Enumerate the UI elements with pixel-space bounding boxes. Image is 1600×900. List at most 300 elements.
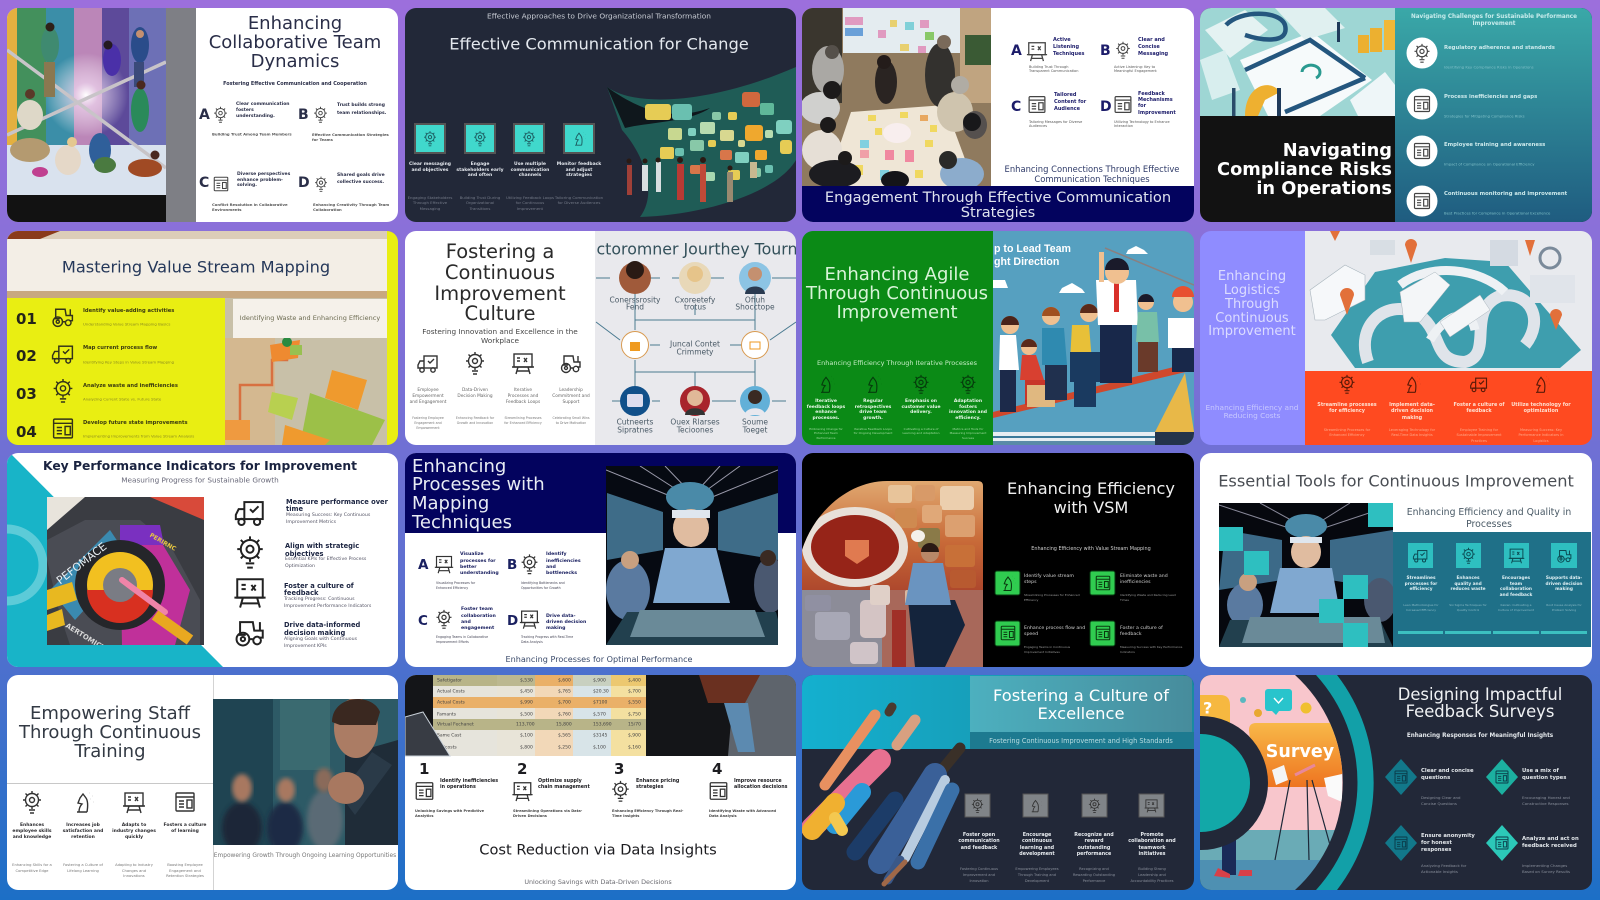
- step 1: Engaging Stakeholders: [408, 194, 452, 200]
- column 3: Sustainable Improvement: [1456, 433, 1502, 437]
- item 1: Measuring Success: Key Continuous: [286, 512, 371, 518]
- top photo strip: [7, 231, 387, 298]
- item D: Shared goals drive: [337, 172, 385, 178]
- footer caption: Enhancing Processes for Optimal Performance: [505, 654, 693, 664]
- item C: Conflict Resolution in Collaborative: [212, 202, 288, 206]
- column 3: [1073, 794, 1115, 883]
- column 3: Processes and: [508, 392, 539, 398]
- item B: Active Listening: Key to: [1114, 65, 1155, 69]
- panel: Key Performance Indicators for Improvement: [0, 453, 398, 667]
- step 2: and often: [468, 172, 492, 178]
- item 2: [1090, 571, 1176, 602]
- item D: [507, 611, 586, 644]
- item 1: Designing Clear and: [1421, 794, 1461, 800]
- item 3: speed: [1024, 630, 1038, 636]
- title: Training: [73, 740, 146, 762]
- column 1: Employee: [417, 386, 439, 392]
- photo: spreadsheet and analyst: $,570: [593, 712, 606, 718]
- item 3: [995, 621, 1085, 654]
- image with teal squares: [1219, 503, 1396, 647]
- item 4: feedback: [1120, 630, 1142, 636]
- item 2: Streamlining Operations via Data-: [513, 809, 583, 813]
- column 3: Kaizen: Cultivating a: [1501, 603, 1532, 607]
- item 1: Efficiency: [1024, 598, 1039, 602]
- item B: Identify: [546, 550, 567, 556]
- item D: Collaboration: [313, 206, 342, 212]
- column 4: Support: [562, 398, 580, 404]
- customer journey diagram: Tecioones: [676, 426, 713, 434]
- panel: Empowering Staff Through Continuous Training: [7, 675, 398, 890]
- photo: spreadsheet and analyst: Actual Costs: [437, 700, 466, 706]
- step 3: Use multiple: [514, 160, 546, 166]
- title: Improvement: [1208, 324, 1296, 338]
- item C: C: [199, 175, 209, 191]
- title: Effective Communication for Change: [449, 34, 749, 54]
- item D: D: [1100, 99, 1112, 115]
- column 1: Enhanced Efficiency: [1329, 433, 1365, 437]
- item 2: inefficiencies: [1120, 578, 1151, 584]
- item 1: [1385, 759, 1474, 806]
- title: Fostering a: [446, 240, 554, 262]
- item A: Building Trust Among Team Members: [212, 132, 292, 136]
- item 3: Ensure anonymity: [1421, 833, 1475, 839]
- column 2: Regular: [863, 398, 884, 404]
- customer journey diagram: trotus: [684, 302, 706, 312]
- photo: spreadsheet and analyst: [405, 675, 796, 756]
- step 03: Analyze waste and inefficiencies: [83, 383, 178, 389]
- item 4: feedback received: [1522, 843, 1577, 849]
- photo: spreadsheet and analyst: $,700: [628, 688, 641, 694]
- column 3: customer value: [901, 404, 941, 410]
- column 4: fosters: [959, 404, 977, 410]
- teal panel: [1393, 532, 1591, 647]
- column 3: feedback: [1466, 408, 1492, 414]
- step 4: Monitor feedback: [557, 160, 602, 166]
- title: Feedback Surveys: [1406, 702, 1554, 720]
- item 3: Improvement Performance Indicators: [284, 602, 372, 608]
- panel: Fostering a Continuous Improvement Culture: [405, 231, 798, 445]
- step 2: [456, 124, 504, 210]
- photo: spreadsheet and analyst: $,100: [593, 744, 606, 750]
- item B: inefficiencies: [546, 558, 581, 564]
- item 2: Encouraging Honest and: [1522, 794, 1570, 800]
- photo: spreadsheet and analyst: $,990: [520, 700, 533, 706]
- customer journey diagram: Sipratnes: [617, 426, 653, 434]
- item C: engagement: [461, 624, 495, 630]
- column 4: [1511, 376, 1571, 443]
- column 2: Leveraging Technology for: [1389, 428, 1436, 432]
- column 3: Rewarding Outstanding: [1073, 873, 1115, 877]
- subtitle: Enhancing Responses for Meaningful Insights: [1407, 733, 1554, 739]
- navy title band: Techniques: [411, 512, 512, 532]
- column 3: reward: [1084, 838, 1104, 844]
- subtitle: Measuring Progress for Sustainable Growth: [121, 476, 279, 484]
- step 2: Organizational: [466, 200, 494, 204]
- item C: enhance problem-: [237, 176, 283, 182]
- item A: A: [199, 107, 210, 123]
- column 4: Metrics and Tools for: [953, 427, 984, 431]
- photo: spreadsheet and analyst: Safetigator: [437, 678, 462, 684]
- title: Collaborative Team: [209, 32, 381, 52]
- photo: spreadsheet and analyst: $,450: [520, 688, 533, 694]
- item 2: [237, 536, 367, 568]
- item 3: Foster a culture of: [284, 582, 354, 590]
- photo: sticky note map: [225, 298, 387, 445]
- column 2: Encourage: [1023, 832, 1052, 838]
- column 4: Building Strong: [1138, 867, 1166, 871]
- item D: Mechanisms: [1138, 97, 1173, 103]
- column 3: outstanding: [1078, 844, 1111, 850]
- title: Enhancing: [1218, 268, 1286, 284]
- navy title band: Processes with: [412, 474, 545, 494]
- item A: Techniques: [1053, 51, 1084, 57]
- column 1: and knowledge: [13, 834, 51, 840]
- column 2: Implement data-: [1389, 402, 1435, 408]
- column 1: enhance: [815, 408, 837, 414]
- photo: spreadsheet and analyst: $,250: [558, 744, 571, 750]
- illustration: compliance documents: [1200, 8, 1395, 116]
- item 2: Optimization: [285, 562, 315, 568]
- column 2: development: [1019, 850, 1055, 856]
- column 2: growth.: [863, 414, 883, 420]
- subtitle: Fostering Effective Communication and Cooperation: [223, 81, 367, 87]
- item B: [507, 550, 581, 590]
- right teal panel: [1395, 8, 1592, 222]
- item A: fosters: [236, 106, 254, 112]
- item A: [418, 550, 499, 590]
- column 4: Leadership and: [1138, 873, 1166, 877]
- column 1: [807, 376, 846, 440]
- caption: Empowering Growth Through Ongoing Learning Opportunities: [214, 853, 396, 859]
- green text panel: [802, 231, 993, 445]
- title panel: Fostering a Culture of: [993, 686, 1170, 704]
- item C: C: [418, 613, 428, 629]
- title: Cost Reduction via Data Insights: [479, 842, 717, 858]
- item C: [418, 606, 496, 644]
- item 1: Streamlining Processes for Enhanced: [1024, 593, 1080, 597]
- item 4: Identifying Waste with Advanced: [709, 809, 777, 813]
- item A: Listening: [1053, 44, 1079, 50]
- column 1: Empowerment: [416, 426, 440, 430]
- column 1: Enhanced Team: [814, 431, 838, 435]
- column 4: Measuring Success: Key: [1520, 428, 1562, 432]
- column 1: Embracing Change for: [809, 427, 844, 431]
- photo: team stretching ropes in front of colored stripes: [7, 8, 166, 222]
- column 4: Logistics: [1533, 439, 1549, 443]
- column 3: Learning and Adaptation: [903, 431, 940, 435]
- item 3: responses: [1421, 847, 1451, 853]
- column 2: Growth and Innovation: [457, 421, 493, 425]
- column 4: [1546, 543, 1582, 612]
- column 4: Celebrating Small Wins: [552, 416, 590, 420]
- column 2: Iterative Feedback Loops: [854, 427, 892, 431]
- survey illustration with arcs: Survey: [1266, 742, 1335, 762]
- column 3: Adapts to: [122, 822, 146, 828]
- column 4: driven decision: [1546, 580, 1582, 586]
- item A: better: [460, 564, 477, 570]
- photo: executive pointing: [213, 698, 398, 854]
- column 1: processes.: [812, 414, 840, 420]
- panel: Enhancing Collaborative Team Dynamics: [7, 8, 398, 222]
- panel: Cost Reduction via Data Insights: [405, 675, 796, 890]
- column 4: Engagement and: [169, 869, 201, 873]
- item 2: [1406, 88, 1537, 120]
- column 4: Supports data-: [1546, 574, 1582, 580]
- title: Improvement: [836, 302, 958, 322]
- item B: bottlenecks: [546, 570, 577, 576]
- column 4: Accountability Practices: [1131, 879, 1174, 883]
- step 1: Through Effective: [412, 200, 448, 204]
- column 1: Engagement and: [414, 421, 442, 425]
- photo: spreadsheet and analyst: $7100: [593, 700, 607, 706]
- photo: spreadsheet and analyst: $,700: [558, 700, 571, 706]
- item C: C: [1011, 99, 1021, 115]
- item 2: question types: [1522, 775, 1566, 781]
- title: Continuous: [445, 260, 555, 284]
- column 1: Streamlines: [1406, 574, 1436, 580]
- item C: [1011, 92, 1087, 128]
- column 1: communication: [958, 838, 1000, 844]
- item A: Building Trust Through: [1029, 65, 1068, 69]
- item 1: steps: [1024, 578, 1037, 584]
- item 4: decision making: [284, 629, 346, 637]
- title: Dynamics: [251, 50, 339, 72]
- item 4: Drive data-informed: [284, 621, 361, 629]
- photo: spreadsheet and analyst: 15,800: [556, 722, 572, 728]
- customer journey diagram: [595, 231, 798, 445]
- column 3: delivery.: [910, 408, 932, 414]
- column 4: [164, 793, 206, 878]
- item A: Active: [1053, 37, 1071, 43]
- photo: spreadsheet and analyst: Velicosts: [437, 744, 457, 750]
- illustration: cartoon team on a rising plank: ght Direction: [994, 256, 1059, 268]
- customer journey diagram: Toeget: [742, 426, 767, 434]
- customer journey diagram: Soume: [742, 418, 768, 426]
- photo: spreadsheet and analyst: $,500: [520, 712, 533, 718]
- item B: Meaningful Engagement: [1114, 69, 1157, 73]
- column 4: efficiency.: [955, 414, 981, 420]
- item 1: Concise Questions: [1421, 800, 1457, 806]
- step 3: Utilizing Feedback Loops: [506, 194, 554, 200]
- item C: Environments: [212, 206, 242, 212]
- item A: understanding: [460, 570, 499, 576]
- subtitle: Enhancing Connections Through Effective: [1005, 164, 1179, 174]
- photo: spreadsheet and analyst: Virtual Fechanet: [437, 722, 474, 728]
- column 2: driven decision: [1391, 408, 1434, 414]
- column 4: Retention Strategies: [166, 874, 204, 878]
- title: Key Performance Indicators for Improvement: [43, 459, 357, 473]
- column 2: [1389, 376, 1436, 437]
- item 4: Continuous monitoring and improvement: [1444, 191, 1568, 197]
- column 3: performance: [1077, 850, 1112, 856]
- column 4: Leadership: [559, 386, 583, 392]
- column 4: Success: [962, 436, 974, 440]
- step 03: Analyzing Current State vs. Future State: [83, 396, 162, 402]
- navy title band: [405, 453, 796, 533]
- subtitle: Enhancing Efficiency and Quality in: [1407, 506, 1571, 518]
- panel heading: Improvement: [1473, 21, 1516, 27]
- column 4: Root Cause Analysis for: [1546, 603, 1582, 607]
- column 1: [410, 356, 447, 430]
- column 3: Practices: [1471, 439, 1487, 443]
- item 3: Improvement Initiatives: [1024, 650, 1060, 654]
- column 3: Emphasis on: [905, 398, 937, 404]
- customer journey diagram: ctoromner Jourthey Tourn: [596, 240, 798, 258]
- photo: spreadsheet and analyst: $,600: [558, 678, 571, 684]
- item B: and: [546, 564, 556, 570]
- column 3: [112, 793, 156, 878]
- item 4: [1406, 186, 1568, 216]
- item D: Utilizing Technology to Enhance: [1114, 120, 1170, 124]
- photo: spreadsheet and analyst: $,900: [593, 678, 606, 684]
- item C: Tailored: [1054, 92, 1077, 98]
- column 1: Fostering Employee: [412, 416, 444, 420]
- diagonal capsule collage: [812, 707, 960, 884]
- item 1: Measure performance over: [286, 498, 389, 506]
- column 3: [1498, 543, 1535, 612]
- column 3: Iterative: [514, 386, 532, 392]
- customer journey diagram: Cutneerts: [617, 418, 654, 426]
- column 2: Empowering Employees: [1015, 867, 1059, 871]
- item B: B: [507, 557, 517, 573]
- column 2: Six Sigma Techniques for: [1449, 603, 1488, 607]
- column 4: making: [1555, 586, 1573, 592]
- item 1: questions: [1421, 775, 1450, 781]
- item 2: Driven Decisions: [513, 814, 547, 818]
- column 2: Increases job: [66, 822, 101, 828]
- item 1: 1: [419, 760, 429, 778]
- item 4: Analyze and act on: [1522, 836, 1579, 842]
- panel: Enhancing Agile Through Continuous Improvement: [802, 231, 1194, 445]
- column 2: retention: [71, 834, 95, 840]
- customer journey diagram: Shocctope: [735, 302, 775, 312]
- column 2: Decision Making: [457, 392, 493, 398]
- item 3: [1385, 825, 1475, 874]
- orange band: [1305, 371, 1592, 445]
- step 04: Develop future state improvements: [83, 420, 188, 426]
- item 4: Improvement KPIs: [284, 642, 327, 648]
- image: woman with helmet and control table: [606, 466, 786, 645]
- photo: spreadsheet and analyst: $,900: [628, 732, 641, 738]
- photo: spreadsheet and analyst: $,400: [628, 678, 641, 684]
- item A: A: [1011, 43, 1022, 59]
- subtitle: Enhancing Efficiency with Value Stream Mapping: [1031, 546, 1151, 552]
- item 1: [236, 498, 389, 525]
- step 03: 03: [16, 385, 37, 403]
- photo: spreadsheet and analyst: $,800: [520, 744, 533, 750]
- item 4: Data Analysis: [709, 814, 737, 818]
- item 2: Process inefficiencies and gaps: [1444, 94, 1537, 100]
- column 3: Foster a culture of: [1454, 402, 1505, 408]
- item 3: Tracking Progress: Continuous: [283, 596, 355, 602]
- photo: spreadsheet and analyst: $,160: [628, 744, 641, 750]
- item 4: [1486, 825, 1579, 874]
- panel: Effective Communication for Change: [405, 8, 796, 222]
- column 4: innovation and: [949, 408, 987, 414]
- item 1: Identify value stream: [1024, 572, 1074, 578]
- column 4: Performance Indicators in: [1519, 433, 1563, 437]
- title: Improvement: [434, 282, 566, 304]
- title panel: [970, 676, 1192, 732]
- item 4: [237, 621, 361, 648]
- survey illustration with arcs: ?: [1203, 698, 1212, 718]
- item D: collective success.: [337, 178, 384, 184]
- title panel: Excellence: [1038, 704, 1124, 722]
- item 1: [415, 760, 498, 818]
- item C: collaboration: [461, 612, 496, 618]
- column 1: Empowerment: [412, 392, 444, 398]
- item 1: [1406, 38, 1555, 70]
- column 2: for Ongoing Development: [854, 431, 893, 435]
- photo: team around table with sticky notes: [800, 8, 991, 190]
- step 02: [16, 345, 175, 365]
- column 1: [958, 794, 1000, 883]
- step 4: Tailoring Communication: [554, 194, 604, 200]
- step 04: 04: [16, 423, 37, 441]
- panel: Enhancing Processes with Mapping Techniques: [405, 453, 796, 667]
- step 01: 01: [16, 310, 37, 328]
- step 1: [408, 124, 452, 210]
- title band: Mastering Value Stream Mapping: [62, 258, 330, 276]
- item D: for: [1138, 103, 1147, 109]
- item 3: Employee training and awareness: [1444, 142, 1545, 148]
- panel: Navigating Compliance Risks in Operations: [1200, 8, 1592, 222]
- column 4: Commitment and: [552, 392, 590, 398]
- photo: spreadsheet and analyst: Same Cast: [437, 732, 461, 738]
- item C: Diverse perspectives: [237, 170, 291, 176]
- item C: Tailoring Messages for Diverse: [1028, 120, 1082, 124]
- column 4: Fosters a culture: [164, 822, 206, 828]
- item C: Audiences: [1029, 124, 1047, 128]
- column 3: Adapting to Industry: [115, 863, 154, 867]
- column 1: Enhances: [20, 822, 44, 828]
- item B: Opportunities for Growth: [521, 586, 561, 590]
- panel: Enhancing Logistics Through Continuous Improvement: [1200, 231, 1592, 445]
- column 3: collaboration: [1500, 586, 1532, 592]
- column 4: Promote: [1140, 832, 1164, 838]
- step 4: [554, 124, 604, 204]
- column 2: Development: [1025, 879, 1050, 883]
- title: Enhancing Efficiency: [1007, 478, 1175, 498]
- item 2: Essential KPIs for Effective Process: [285, 556, 367, 562]
- item 2: Constructive Responses: [1522, 800, 1569, 806]
- title: with VSM: [1054, 498, 1128, 516]
- step 03: [16, 379, 178, 403]
- column 2: Real-Time Data Insights: [1391, 433, 1433, 437]
- column 1: Lean Methodologies for: [1403, 603, 1439, 607]
- item 3: Engaging Teams in Continuous: [1024, 645, 1071, 649]
- item D: driven decision: [546, 618, 586, 624]
- item 1: time: [286, 505, 303, 513]
- step 3: [506, 124, 554, 210]
- item D: Data Analysis: [521, 640, 543, 644]
- title: Enhancing Agile: [825, 264, 969, 284]
- column 3: for Enhanced Efficiency: [504, 421, 542, 425]
- item D: Feedback: [1138, 91, 1165, 97]
- subtitle: Processes: [1466, 518, 1512, 530]
- gauge illustration: AERTOMICT: [64, 622, 107, 653]
- item A: A: [418, 557, 429, 573]
- column 1: Streamline processes: [1317, 402, 1377, 408]
- step 01: [16, 308, 174, 328]
- title: Culture: [465, 302, 535, 324]
- item D: making: [546, 624, 565, 630]
- item A: Transparent Communication: [1028, 69, 1078, 73]
- item 2: Eliminate waste and: [1120, 572, 1168, 578]
- item 1: Clear and concise: [1421, 768, 1474, 774]
- subtitle band: [970, 732, 1194, 749]
- customer journey diagram: Cxoreetefy: [675, 296, 716, 304]
